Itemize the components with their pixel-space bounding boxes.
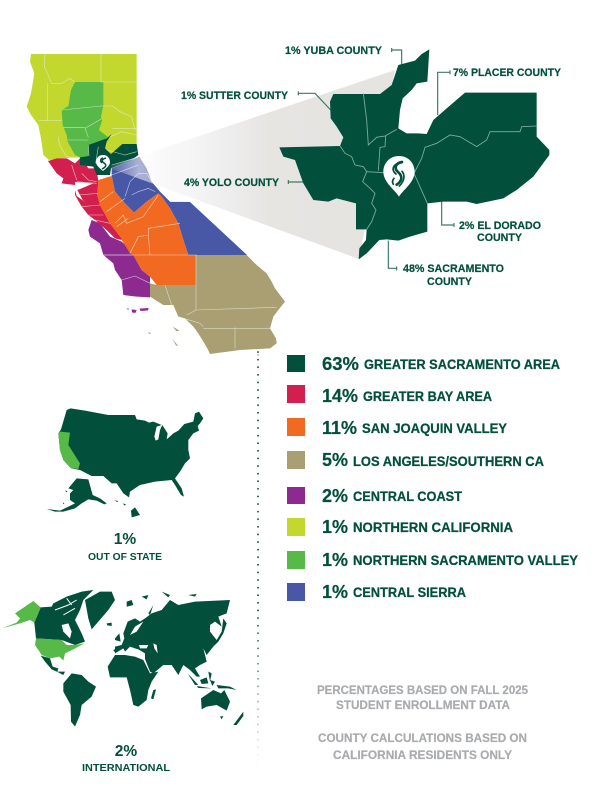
county lines: central	[72, 165, 197, 255]
dotted divider	[257, 352, 259, 768]
legend row: Northern California: NORTHERN CALIFORNIA	[353, 520, 513, 535]
label: Yolo: 4% YOLO COUNTY	[184, 177, 280, 189]
legend row: Los Angeles: LOS ANGELES/SOUTHERN CA	[353, 454, 544, 469]
region: San Joaquin Valley	[97, 176, 196, 285]
legend row: Northern California: 1%	[322, 517, 348, 537]
legend row: Central Sierra: 1%	[322, 582, 348, 602]
label: Sacramento second line: COUNTY	[427, 276, 473, 288]
legend row: San Joaquin: SAN JOAQUIN VALLEY	[362, 421, 507, 436]
inland seas	[130, 622, 158, 653]
stat: international	[82, 743, 171, 774]
legend row: Greater Bay	[287, 385, 492, 406]
Hudson Bay and arctic channels	[55, 598, 77, 638]
legend row: San Joaquin: 11%	[322, 418, 357, 438]
northern regions	[27, 54, 137, 160]
wedge: zoom projection to county detail	[107, 70, 395, 259]
note: data source	[317, 685, 529, 712]
legend row: Greater Sacramento: 63%	[322, 354, 359, 374]
legend row: Greater Sacramento	[287, 354, 560, 374]
bay water	[75, 182, 93, 202]
map: county detail	[279, 48, 549, 270]
dark north and south America	[34, 590, 121, 727]
legend row: Northern Sacramento Valley: 1%	[322, 550, 348, 570]
icon: campus pin	[383, 156, 415, 197]
label: Yuba: 1% YUBA COUNTY	[285, 45, 383, 57]
central regions	[48, 157, 247, 285]
county lines: north	[38, 54, 137, 158]
Alaska highlight	[2, 601, 41, 628]
legend	[287, 354, 578, 602]
map: California regions	[27, 54, 285, 356]
legend row: Greater Bay: 14%	[322, 386, 358, 406]
labels: county percentages	[181, 45, 562, 288]
California highlight	[58, 432, 80, 469]
region: Los Angeles / Southern CA	[150, 255, 285, 354]
legend row: San Joaquin	[287, 418, 507, 438]
region: Central Sierra	[112, 157, 247, 255]
islands	[127, 308, 259, 356]
note: county calculations	[318, 733, 527, 762]
counties silhouette	[279, 49, 549, 259]
legend row: Central Sierra	[287, 582, 466, 602]
note line: CALIFORNIA RESIDENTS ONLY	[333, 750, 512, 762]
region: Greater Bay Area	[48, 157, 122, 240]
label: Placer: 7% PLACER COUNTY	[453, 67, 562, 79]
Alaska	[47, 478, 107, 512]
map: United States	[47, 408, 203, 517]
legend row: Central Coast: 2%	[322, 486, 348, 506]
region: Greater Sacramento	[80, 134, 138, 175]
legend row: Central Sierra: CENTRAL SIERRA	[353, 585, 466, 600]
legend row: Greater Bay: GREATER BAY AREA	[363, 389, 492, 404]
legend row: Northern Sacramento Valley	[287, 550, 578, 570]
Hawaii	[63, 491, 140, 517]
caption: INTERNATIONAL	[82, 762, 171, 774]
contiguous states	[58, 408, 203, 497]
note line: STUDENT ENROLLMENT DATA	[336, 700, 510, 712]
region: Northern California	[27, 54, 137, 160]
Eurasia	[115, 600, 230, 677]
leader lines	[288, 48, 454, 270]
icon: campus pin on state map	[96, 155, 110, 171]
legend row: Los Angeles	[287, 450, 544, 470]
region: Northern Sacramento Valley	[62, 82, 108, 157]
Sacramento county lines	[88, 145, 137, 165]
note line: PERCENTAGES BASED ON FALL 2025	[317, 685, 529, 697]
USA highlight	[35, 638, 84, 661]
legend row: Greater Sacramento: GREATER SACRAMENTO AREA	[364, 357, 560, 372]
percent: 1%	[114, 531, 136, 548]
percent: 2%	[115, 743, 137, 760]
Africa	[108, 655, 158, 707]
label: El Dorado: 2% EL DORADO	[459, 220, 541, 232]
legend row: Central Coast	[287, 486, 463, 506]
note line: COUNTY CALCULATIONS BASED ON	[318, 733, 527, 745]
region: Central Coast	[88, 220, 150, 297]
map: world	[2, 590, 243, 727]
southern county lines	[100, 255, 277, 348]
stat: out of state	[88, 531, 162, 563]
label: Sacramento: 48% SACRAMENTO	[403, 263, 504, 275]
Old World	[108, 592, 243, 725]
Americas	[2, 590, 121, 727]
caption: OUT OF STATE	[88, 551, 162, 563]
legend row: Northern Sacramento Valley: NORTHERN SACRAMENTO VALLEY	[353, 553, 578, 568]
label: El Dorado second line: COUNTY	[477, 232, 523, 244]
legend row: Northern California	[287, 517, 513, 537]
legend row: Central Coast: CENTRAL COAST	[353, 489, 463, 504]
county borders	[340, 93, 537, 229]
legend row: Los Angeles: 5%	[322, 450, 348, 470]
islands and Oceania	[127, 592, 243, 725]
label: Sutter: 1% SUTTER COUNTY	[181, 90, 289, 102]
